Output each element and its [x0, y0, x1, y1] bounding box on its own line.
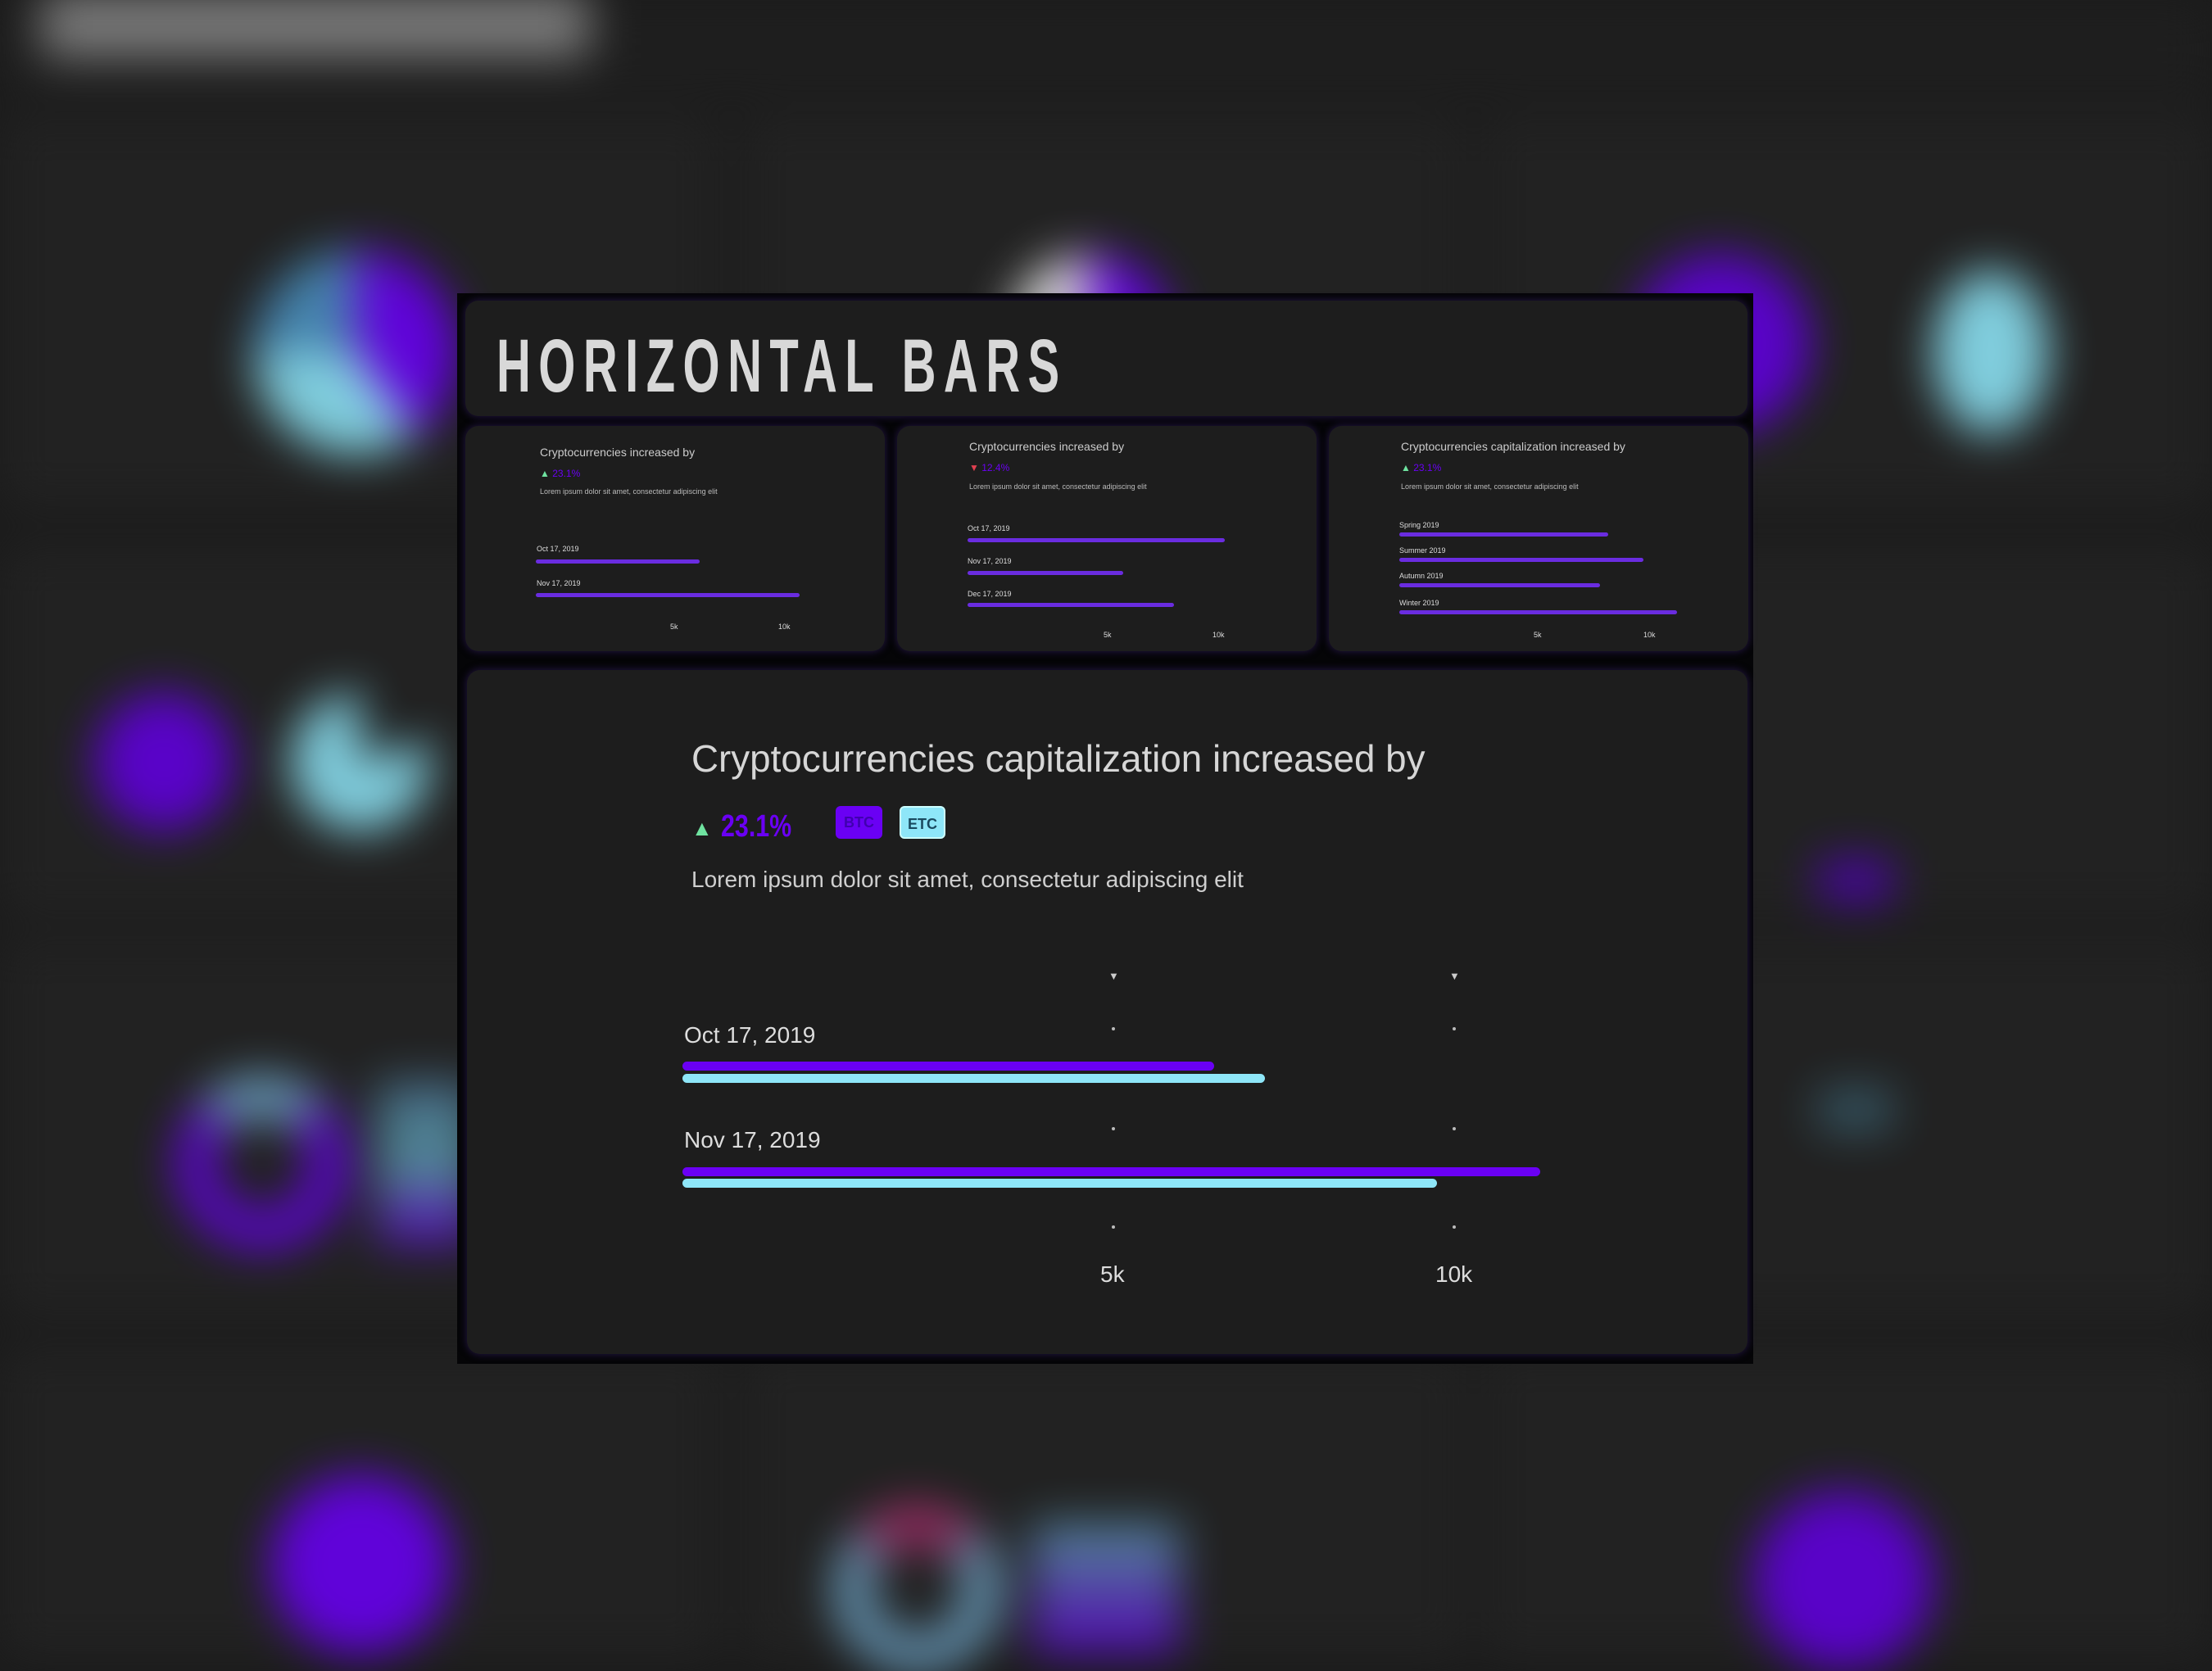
small card 2 [897, 426, 1317, 651]
small card 1: 10k [778, 623, 791, 631]
small card 1 [465, 426, 885, 651]
stat row: arrow, percent, badges [691, 806, 945, 844]
small card 2: Lorem ipsum dolor sit amet, consectetur adipiscing elit [969, 482, 1147, 491]
stat row: arrow, percent, badges: ETC [908, 816, 937, 832]
small card 2: ▼ 12.4% [969, 462, 1009, 473]
small card 2: Oct 17, 2019 [968, 524, 1010, 532]
small card 2: 5k [1104, 631, 1112, 639]
small card 1: Oct 17, 2019 [537, 545, 579, 553]
chart: Oct 17, 2019 [684, 1022, 815, 1048]
small card 1: 5k [670, 623, 678, 631]
small card 3: 10k [1643, 631, 1656, 639]
main frame [457, 293, 1753, 1364]
chart: 10k [1435, 1261, 1472, 1287]
chart: ▼ [1108, 970, 1119, 982]
stat row: arrow, percent, badges: ▲ [691, 816, 713, 840]
chart [682, 970, 1540, 1287]
small card 3: ▲ 23.1% [1401, 462, 1441, 473]
chart: ▼ [1449, 970, 1460, 982]
small card 1: ▲ 23.1% [540, 468, 580, 479]
small card 3: Cryptocurrencies capitalization increased by [1401, 440, 1625, 453]
small card 1: Lorem ipsum dolor sit amet, consectetur adipiscing elit [540, 487, 718, 496]
title panel [465, 301, 1747, 416]
small card 1: Cryptocurrencies increased by [540, 446, 695, 459]
small card 2: Nov 17, 2019 [968, 557, 1012, 565]
title: HORIZONTAL BARS [496, 324, 1067, 408]
small card 1: Nov 17, 2019 [537, 579, 581, 587]
chart: 5k [1100, 1261, 1125, 1287]
main heading: Cryptocurrencies capitalization increased by [691, 737, 1426, 780]
small card 3: 5k [1534, 631, 1542, 639]
small card 3 [1329, 426, 1748, 651]
small card 2: Cryptocurrencies increased by [969, 440, 1124, 453]
small card 3: Summer 2019 [1399, 546, 1446, 555]
small card 2: Dec 17, 2019 [968, 590, 1012, 598]
small card 3: Winter 2019 [1399, 599, 1439, 607]
small card 3: Lorem ipsum dolor sit amet, consectetur adipiscing elit [1401, 482, 1579, 491]
stat row: arrow, percent, badges: 23.1% [721, 809, 791, 844]
stat row: arrow, percent, badges: BTC [844, 814, 874, 831]
small card 3: Spring 2019 [1399, 521, 1439, 529]
main card [467, 670, 1747, 1354]
description: Lorem ipsum dolor sit amet, consectetur adipiscing elit [691, 867, 1244, 892]
chart: Nov 17, 2019 [684, 1127, 821, 1152]
small card 3: Autumn 2019 [1399, 572, 1444, 580]
small card 2: 10k [1213, 631, 1225, 639]
